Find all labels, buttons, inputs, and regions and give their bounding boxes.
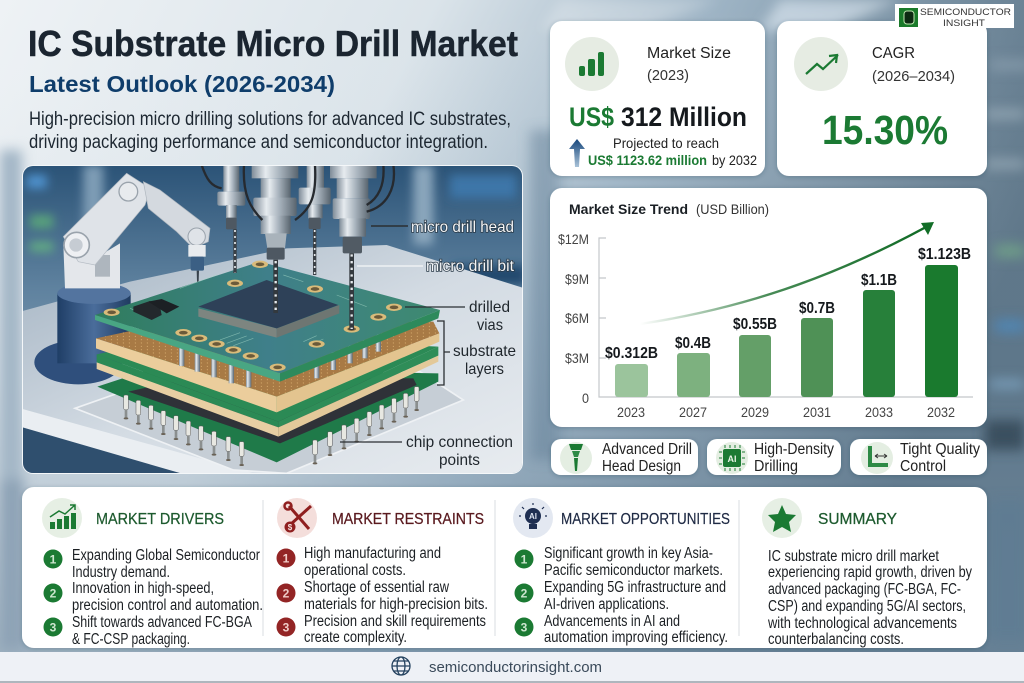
sub: robot arm: [34, 173, 210, 384]
section: market drivers: 3: [50, 620, 57, 634]
label: drilled vias: vias: [477, 317, 503, 334]
section: market opportunities: Advancements in AI and: [544, 613, 680, 630]
label: drilled vias: [405, 299, 510, 334]
feature: advanced drill head design: Head Design: [602, 458, 681, 475]
section: market drivers: [42, 498, 263, 648]
label: chip connection points: [340, 434, 513, 469]
description text: [29, 109, 511, 153]
icon: rising bars: [42, 498, 82, 538]
description text: driving packaging performance and semiconductor integration.: [29, 132, 488, 153]
feature: tight quality control: [850, 439, 987, 475]
y axis: [558, 231, 973, 406]
sub: top green circuit board: [95, 261, 440, 382]
feature: tight quality control: Tight Quality: [900, 441, 980, 458]
section: summary: with technological advancements: [767, 615, 957, 632]
section: market opportunities: automation improving efficiency.: [544, 629, 728, 646]
icon: AI light bulb: AI: [529, 512, 537, 521]
section: summary: IC substrate micro drill market: [768, 548, 940, 565]
sub: middle green substrate layer: [97, 335, 438, 437]
section: market opportunities: 3: [521, 620, 528, 634]
title: IC Substrate Micro Drill Market: [28, 23, 518, 64]
section: market drivers: Innovation in high-speed,: [72, 580, 214, 597]
feature: tight quality control: Control: [900, 458, 946, 475]
panel: market size: 312 Million: [621, 102, 747, 132]
section: market drivers: MARKET DRIVERS: [96, 511, 224, 528]
icon: globe: [392, 657, 410, 675]
x axis years: 2031: [803, 404, 831, 420]
panel: micro drill illustration: [20, 165, 530, 475]
bar value labels: $1.123B: [918, 246, 971, 263]
section: market opportunities: Significant growth in key Asia-: [544, 545, 713, 562]
icon: crossed tools: [277, 498, 317, 538]
growth arrow: [640, 222, 934, 324]
y axis: $6M: [565, 310, 589, 326]
x axis years: 2033: [865, 404, 893, 420]
panel: market size: (2023): [647, 67, 689, 84]
section: market drivers: precision control and automation.: [72, 597, 263, 614]
section: market opportunities: AI-driven applications.: [544, 596, 669, 613]
sub: central processor chip: [198, 280, 339, 338]
section: summary: CSP) and expanding 5G/AI sectors,: [768, 598, 966, 615]
section: market opportunities: 1: [521, 552, 528, 566]
label: drilled vias: drilled: [469, 299, 510, 316]
sub: connecting posts: [179, 333, 381, 387]
y axis: $9M: [565, 271, 589, 287]
label: substrate layers: substrate: [453, 343, 516, 360]
y axis: $3M: [565, 350, 589, 366]
icon: bar chart: [565, 37, 619, 91]
bar value labels: $1.1B: [861, 272, 897, 289]
icon: trend arrow: [794, 37, 848, 91]
label: chip connection points: chip connection: [406, 434, 513, 451]
section: market drivers: Industry demand.: [72, 564, 170, 581]
x axis years: 2027: [679, 404, 707, 420]
x axis years: [617, 404, 955, 420]
logo: Semiconductor Insight: SEMICONDUCTOR: [920, 7, 1011, 18]
panel: market size: US$: [569, 102, 614, 132]
section: market restraints: operational costs.: [304, 562, 406, 579]
icon: up arrow: [569, 139, 585, 167]
x axis years: 2023: [617, 404, 645, 420]
section: market opportunities: 2: [521, 586, 528, 600]
label: micro drill bit: micro drill bit: [426, 258, 515, 275]
footer bar: [0, 652, 1024, 683]
bars: [615, 265, 958, 397]
section: summary: SUMMARY: [818, 511, 897, 528]
section: market restraints: Precision and skill requirements: [304, 613, 486, 630]
section: market restraints: High manufacturing and: [304, 545, 441, 562]
icon: chip: AI: [728, 454, 736, 464]
section: market restraints: 3: [283, 620, 290, 634]
icon: star: [762, 498, 802, 538]
panel: market size: Market Size: [647, 45, 731, 62]
footer bar: semiconductorinsight.com: [429, 659, 602, 676]
panel: market size: Projected to reach: [613, 135, 719, 151]
section: summary: [762, 498, 972, 648]
panel: market size: [550, 21, 765, 176]
bar value labels: $0.4B: [675, 335, 711, 352]
section: market opportunities: Expanding 5G infrastructure and: [544, 579, 726, 596]
sub: metal base plate: [75, 372, 463, 473]
feature: high-density drilling: High-Density: [754, 441, 834, 458]
section: summary: experiencing rapid growth, driven by: [768, 564, 972, 581]
sub: drill spindles and bits: [202, 165, 394, 330]
chart title: (USD Billion): [696, 201, 769, 217]
panel: market size trend chart: [550, 188, 987, 427]
panel: CAGR: CAGR: [872, 45, 915, 62]
section: summary: advanced packaging (FC-BGA, FC-: [768, 581, 961, 598]
section: market drivers: Shift towards advanced FC-BGA: [72, 614, 253, 631]
logo: Semiconductor Insight: [895, 4, 1014, 29]
section: market restraints: materials for high-precision bits.: [304, 596, 488, 613]
panel: CAGR: [777, 21, 987, 176]
bar value labels: $0.7B: [799, 300, 835, 317]
subtitle: Latest Outlook (2026-2034): [29, 71, 335, 97]
section: market opportunities: MARKET OPPORTUNITIES: [561, 511, 730, 528]
y axis: 0: [582, 390, 589, 406]
feature: high-density drilling: [707, 439, 841, 475]
section: market drivers: 2: [50, 586, 57, 600]
icon: drill head: [560, 442, 592, 474]
logo: Semiconductor Insight: INSIGHT: [943, 18, 985, 29]
y axis: $12M: [558, 231, 589, 247]
label: substrate layers: layers: [465, 361, 504, 378]
panel: CAGR: (2026–2034): [872, 68, 955, 85]
bar value labels: $0.312B: [605, 345, 658, 362]
feature: advanced drill head design: [551, 439, 698, 475]
section: market drivers: 1: [50, 552, 57, 566]
bar value labels: [605, 246, 971, 362]
section: summary: counterbalancing costs.: [768, 631, 904, 648]
section: market restraints: [276, 498, 488, 646]
chart title: Market Size Trend: [569, 201, 688, 217]
icon: AI light bulb: [513, 498, 553, 538]
x axis years: 2029: [741, 404, 769, 420]
section: market drivers: Expanding Global Semiconductor: [72, 547, 260, 564]
description text: High-precision micro drilling solutions for advanced IC substrates,: [29, 109, 511, 130]
panel: bottom summary strip: [22, 487, 987, 648]
x axis years: 2032: [927, 404, 955, 420]
section: market opportunities: [513, 498, 730, 646]
panel: market size: by 2032: [712, 152, 757, 168]
sub: bottom board and chip with pins: [97, 368, 438, 466]
section: market restraints: MARKET RESTRAINTS: [332, 511, 484, 528]
panel: market size: US$ 1123.62 million: [588, 152, 707, 168]
label: substrate layers: [437, 321, 516, 385]
section: market opportunities: Pacific semiconductor markets.: [544, 562, 723, 579]
sub: copper substrate layer: [96, 322, 439, 412]
section: market restraints: 2: [283, 586, 290, 600]
label: chip connection points: points: [439, 452, 480, 469]
bar value labels: $0.55B: [733, 316, 777, 333]
icon: crossed tools: $: [288, 523, 293, 532]
label: micro drill head: micro drill head: [411, 219, 514, 236]
icon: ruler: [861, 442, 893, 474]
section: market restraints: create complexity.: [304, 629, 407, 646]
panel: CAGR: 15.30%: [822, 107, 948, 153]
feature: advanced drill head design: Advanced Drill: [602, 441, 692, 458]
section: market restraints: Shortage of essential raw: [304, 579, 450, 596]
feature: high-density drilling: Drilling: [754, 458, 798, 475]
chart title: [569, 201, 769, 217]
section: market restraints: 1: [283, 552, 290, 566]
section: market drivers: & FC-CSP packaging.: [72, 631, 190, 648]
